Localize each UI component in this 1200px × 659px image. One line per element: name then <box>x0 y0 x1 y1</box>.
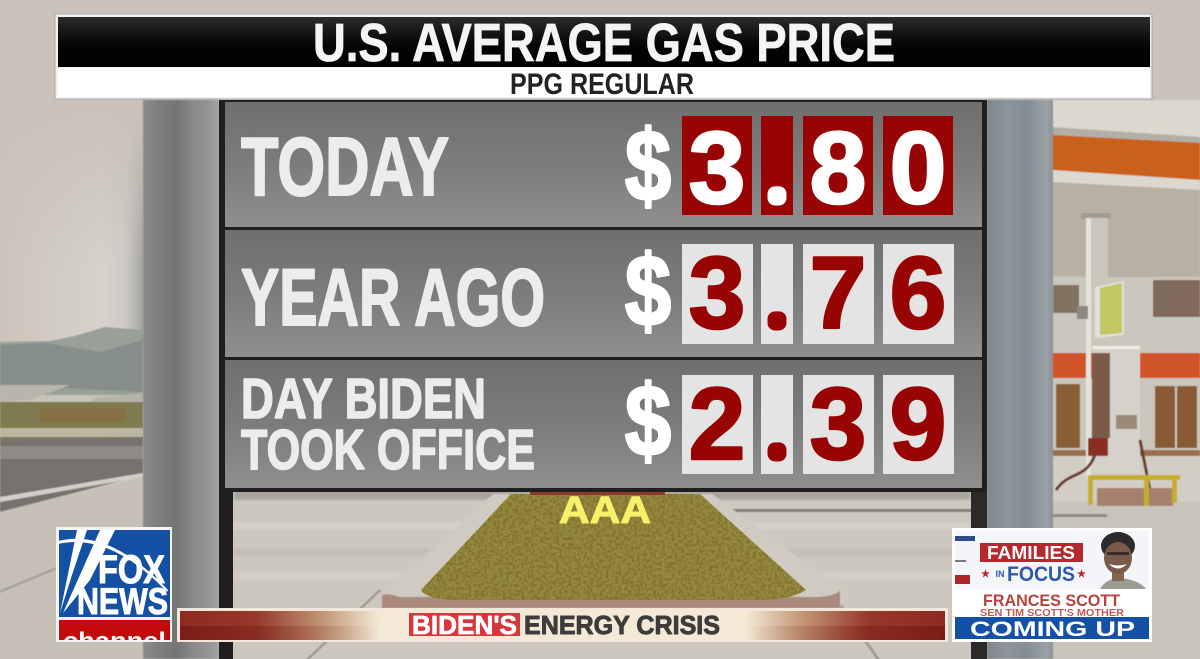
digit tiles: 2.39 <box>682 367 954 481</box>
background: gas station <box>1052 100 1200 659</box>
coming up bar <box>955 617 1149 639</box>
label: today: TODAY <box>241 120 449 213</box>
digit tiles: 3.76: . <box>773 298 781 329</box>
dollar sign: $ <box>625 365 671 477</box>
sign frame: dark uprights <box>219 100 987 659</box>
searchlight beams <box>58 530 168 613</box>
background: left wall and landscape <box>0 100 143 659</box>
panel: day Biden took office price <box>225 360 982 488</box>
guest title: SEN TIM SCOTT'S MOTHER <box>980 608 1125 619</box>
families in focus logo <box>980 543 1086 586</box>
label: day Biden took office: TOOK OFFICE <box>241 418 535 482</box>
digit tiles: 3.76: 6 <box>890 236 946 350</box>
guest name: FRANCES SCOTT <box>983 591 1121 610</box>
background: top wall band <box>0 0 1200 110</box>
coming up promo box: COMING UP <box>970 618 1135 641</box>
Fox News logo <box>56 527 172 655</box>
label: year ago: YEAR AGO <box>241 253 545 343</box>
label: day Biden took office: DAY BIDEN <box>241 367 486 431</box>
dollar sign: $ <box>625 110 671 222</box>
source label: AAA: AAA <box>559 490 651 532</box>
digit tiles: 2.39: . <box>773 429 781 460</box>
panel: year ago price <box>225 230 982 357</box>
label: day Biden took office <box>241 367 535 482</box>
digit tiles: 3.80: . <box>773 173 781 204</box>
digit tiles: 3.80: 3 <box>689 111 745 225</box>
digit tiles: 3.80 <box>682 111 953 225</box>
panel: today price <box>225 102 982 227</box>
digit tiles: 3.76: 3 <box>689 236 745 350</box>
digit tiles: 3.80: 0 <box>890 111 946 225</box>
headline: energy crisis: ENERGY CRISIS <box>524 610 720 640</box>
left sign post <box>143 100 219 659</box>
background: pavement floor <box>233 490 972 659</box>
Fox News logo: channel <box>63 628 166 655</box>
wordmark: FOX <box>98 548 165 592</box>
families in focus logo: ★ <box>981 569 990 580</box>
families in focus logo: ★ <box>1077 569 1086 580</box>
tag: Biden's <box>409 613 520 636</box>
digit tiles: 2.39: 3 <box>810 367 866 481</box>
families in focus logo: FOCUS <box>1007 563 1075 586</box>
right sign post <box>987 100 1053 659</box>
subtitle: PPG REGULAR <box>510 68 694 101</box>
digit tiles: 3.76 <box>682 236 954 350</box>
planter with grass <box>382 490 850 608</box>
Fox News logo: NEWS <box>77 581 168 622</box>
digit tiles: 2.39: 9 <box>890 367 946 481</box>
header banner <box>55 13 1152 101</box>
coming up promo box <box>952 528 1152 642</box>
lower-third ticker: BIDEN'S <box>412 610 517 640</box>
families in focus logo: IN <box>996 569 1004 579</box>
lower-third ticker <box>177 608 948 642</box>
families in focus logo: FAMILIES <box>987 543 1075 563</box>
digit tiles: 3.80: 8 <box>810 111 866 225</box>
digit tiles: 3.76: 7 <box>810 236 866 350</box>
dollar sign: $ <box>625 235 671 347</box>
digit tiles: 2.39: 2 <box>689 367 745 481</box>
title: U.S. AVERAGE GAS PRICE <box>313 13 895 73</box>
portrait of Frances Scott <box>1100 532 1146 589</box>
